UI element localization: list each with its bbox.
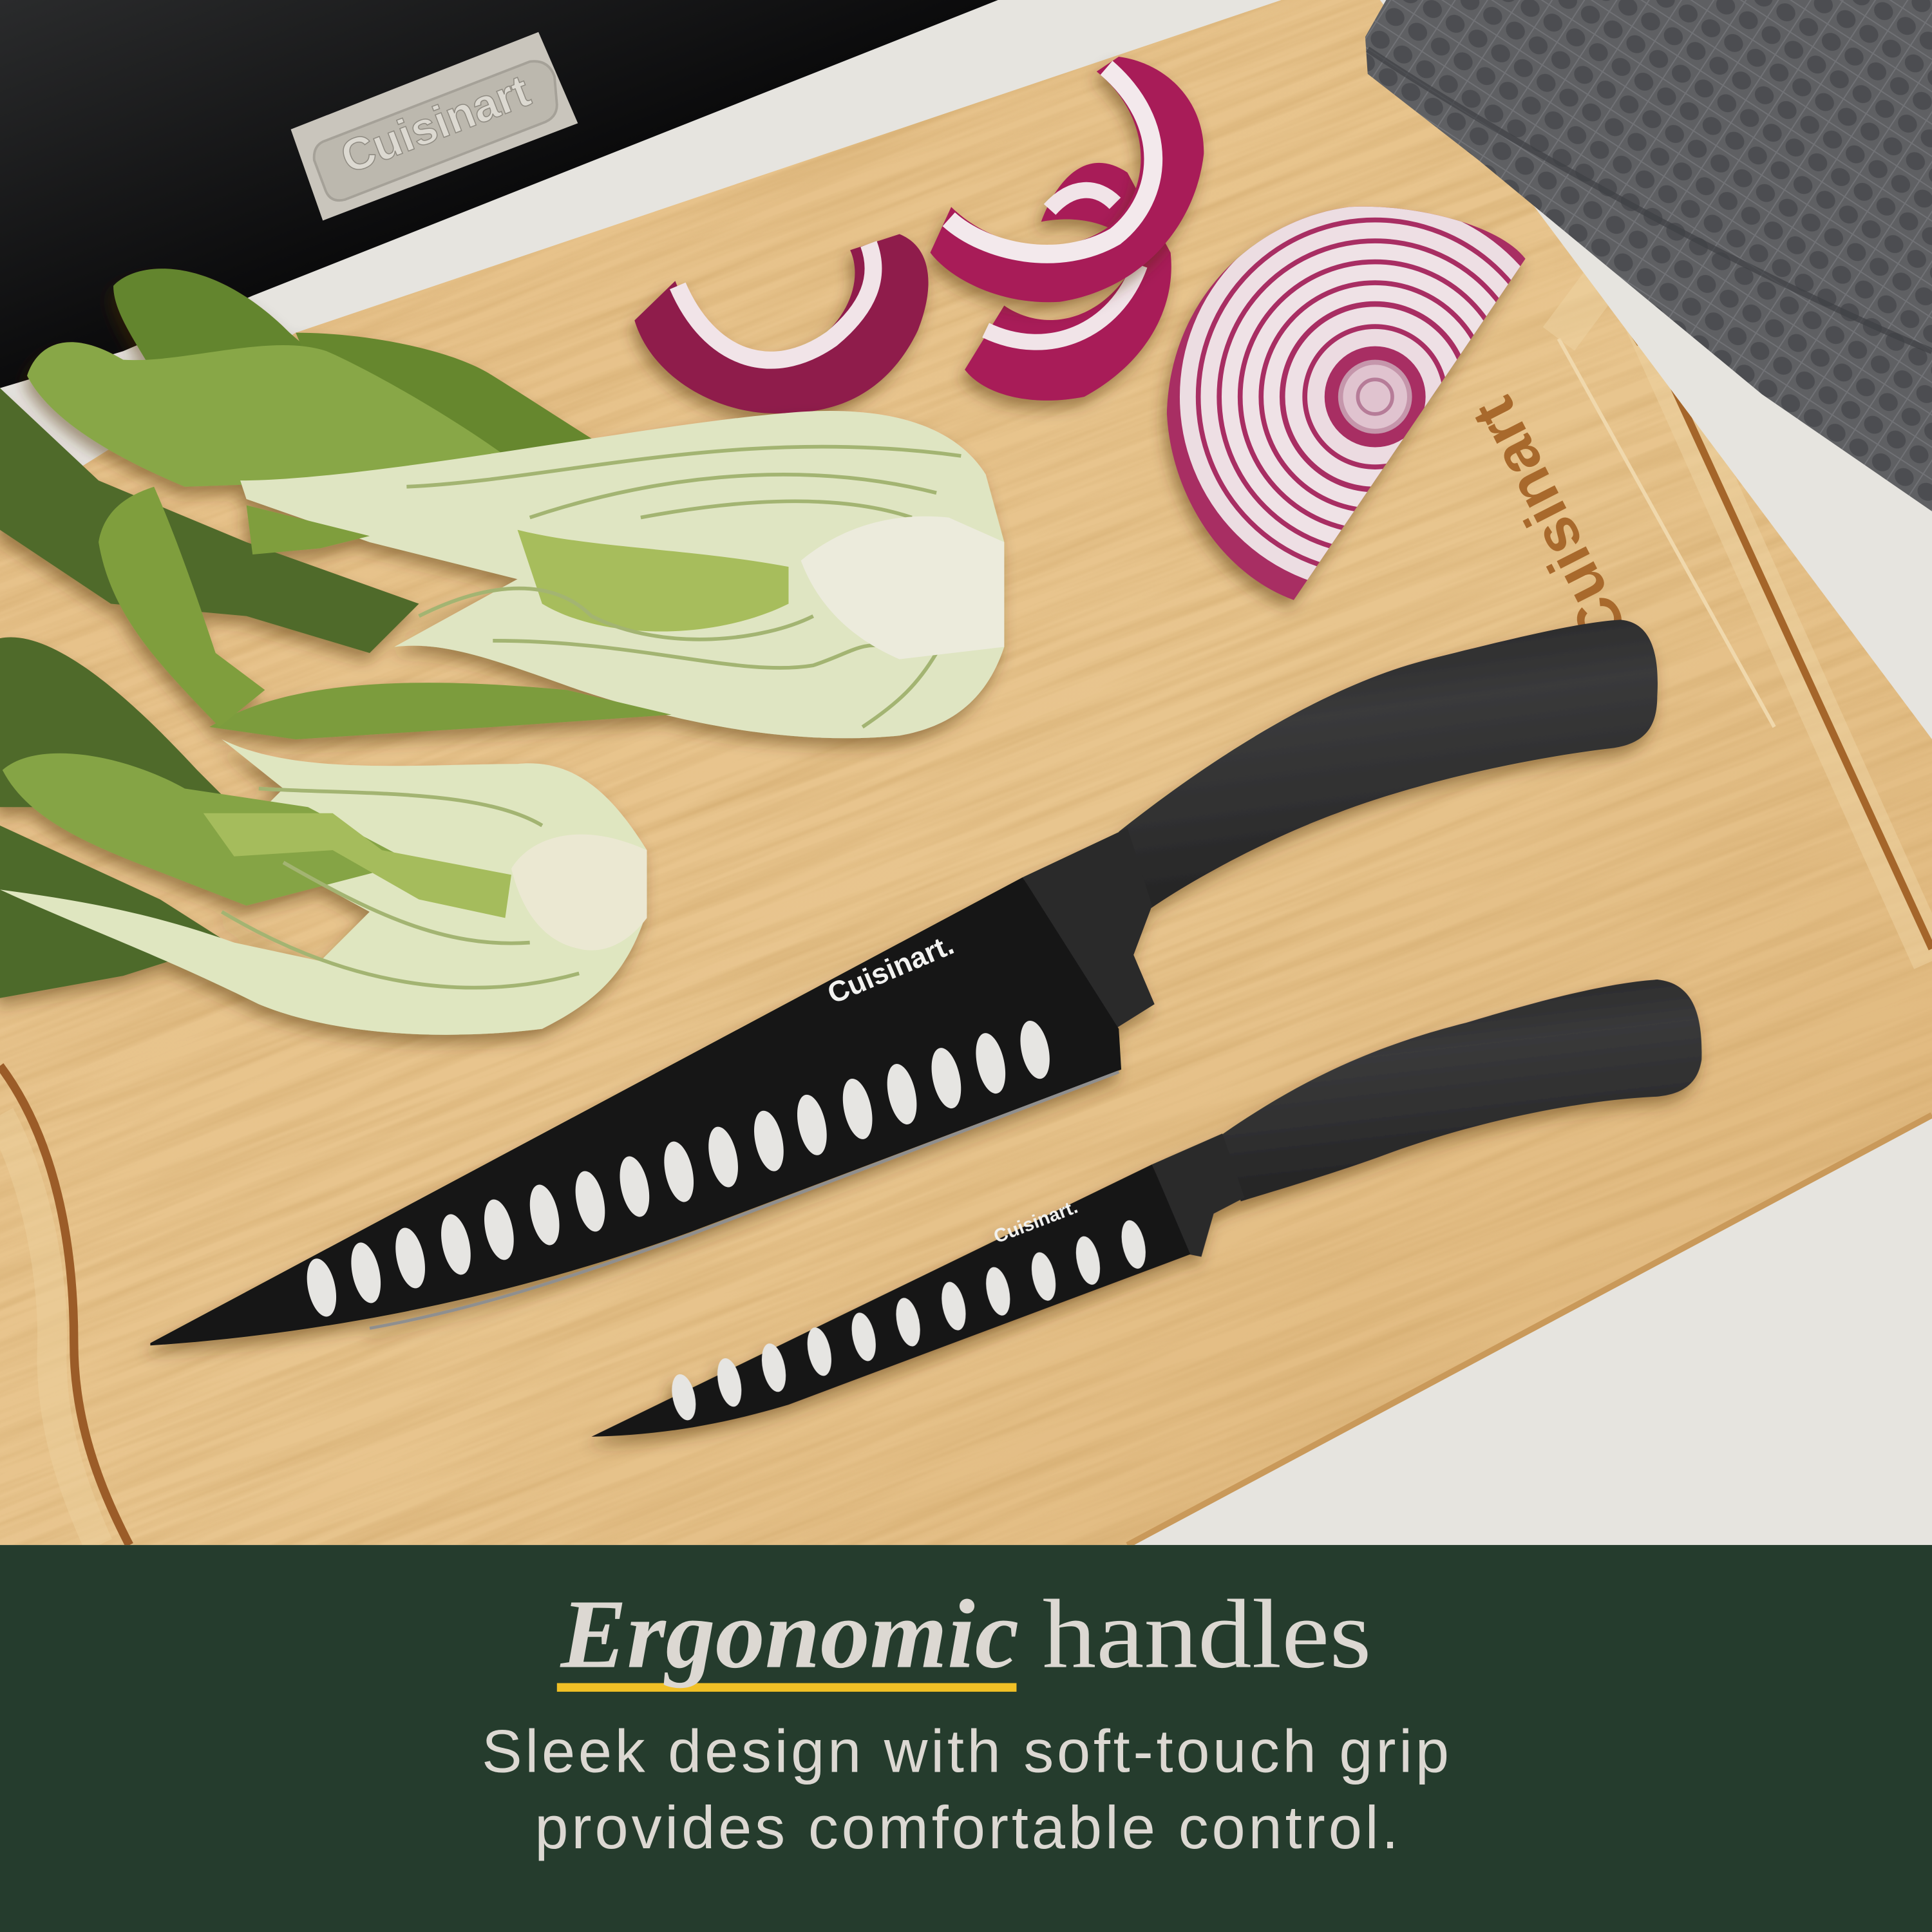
yellow underline <box>557 1683 1016 1692</box>
dark leaf lower <box>0 826 228 998</box>
bok choy head lower <box>0 637 647 1035</box>
brand badge: Cuisinart <box>334 65 537 184</box>
paring knife <box>591 980 1701 1437</box>
inner yellow leaves <box>518 530 788 632</box>
dark leaf upper <box>0 637 234 807</box>
bolster <box>1023 828 1155 1029</box>
engraved logo on board: Cuisinart <box>1458 387 1641 656</box>
bolster <box>1152 1133 1244 1257</box>
blade <box>591 1164 1190 1437</box>
headline <box>560 1580 1371 1689</box>
body text <box>482 1717 1449 1861</box>
dimples <box>302 1018 1054 1320</box>
juice groove <box>0 247 1932 1545</box>
headline: handles <box>1043 1580 1371 1689</box>
onion ring front <box>931 57 1204 302</box>
stem core <box>511 835 647 951</box>
stem streaks <box>222 788 579 988</box>
small yellow leaves <box>204 813 511 918</box>
back dark leaf <box>0 388 419 653</box>
onion ring left <box>634 234 929 413</box>
rear right leaf <box>296 333 610 480</box>
body text: provides comfortable control. <box>535 1794 1399 1861</box>
towel <box>1365 0 1932 511</box>
onion ring back <box>965 163 1171 401</box>
chef knife <box>150 620 1658 1345</box>
headline: Ergonomic <box>560 1580 1019 1689</box>
brand badge <box>291 32 578 220</box>
lower leaf <box>209 683 672 739</box>
stem streaks <box>406 447 961 727</box>
caption panel <box>0 1545 1932 1932</box>
drooping leaf <box>99 487 265 727</box>
photo panel <box>0 0 1932 1546</box>
small leaf <box>247 505 370 554</box>
stem core <box>801 516 1004 659</box>
black appliance <box>0 0 998 388</box>
main leaf <box>27 342 530 487</box>
blade logo: Cuisinart. <box>822 928 958 1010</box>
handle <box>1220 980 1701 1201</box>
handle <box>1119 620 1658 912</box>
counter background <box>0 0 1932 1545</box>
stems <box>240 411 1004 738</box>
board edge highlight <box>1128 1115 1932 1545</box>
bright leaf <box>3 753 413 905</box>
body text: Sleek design with soft-touch grip <box>482 1717 1449 1785</box>
blade logo small: Cuisinart. <box>991 1196 1081 1247</box>
blade edge highlight <box>370 1072 1119 1328</box>
top leaf <box>113 269 339 376</box>
blade <box>150 877 1121 1345</box>
bok choy head upper <box>0 269 1004 739</box>
stems <box>0 739 647 1035</box>
dimples <box>668 1218 1150 1423</box>
onion half slice <box>1167 207 1562 600</box>
